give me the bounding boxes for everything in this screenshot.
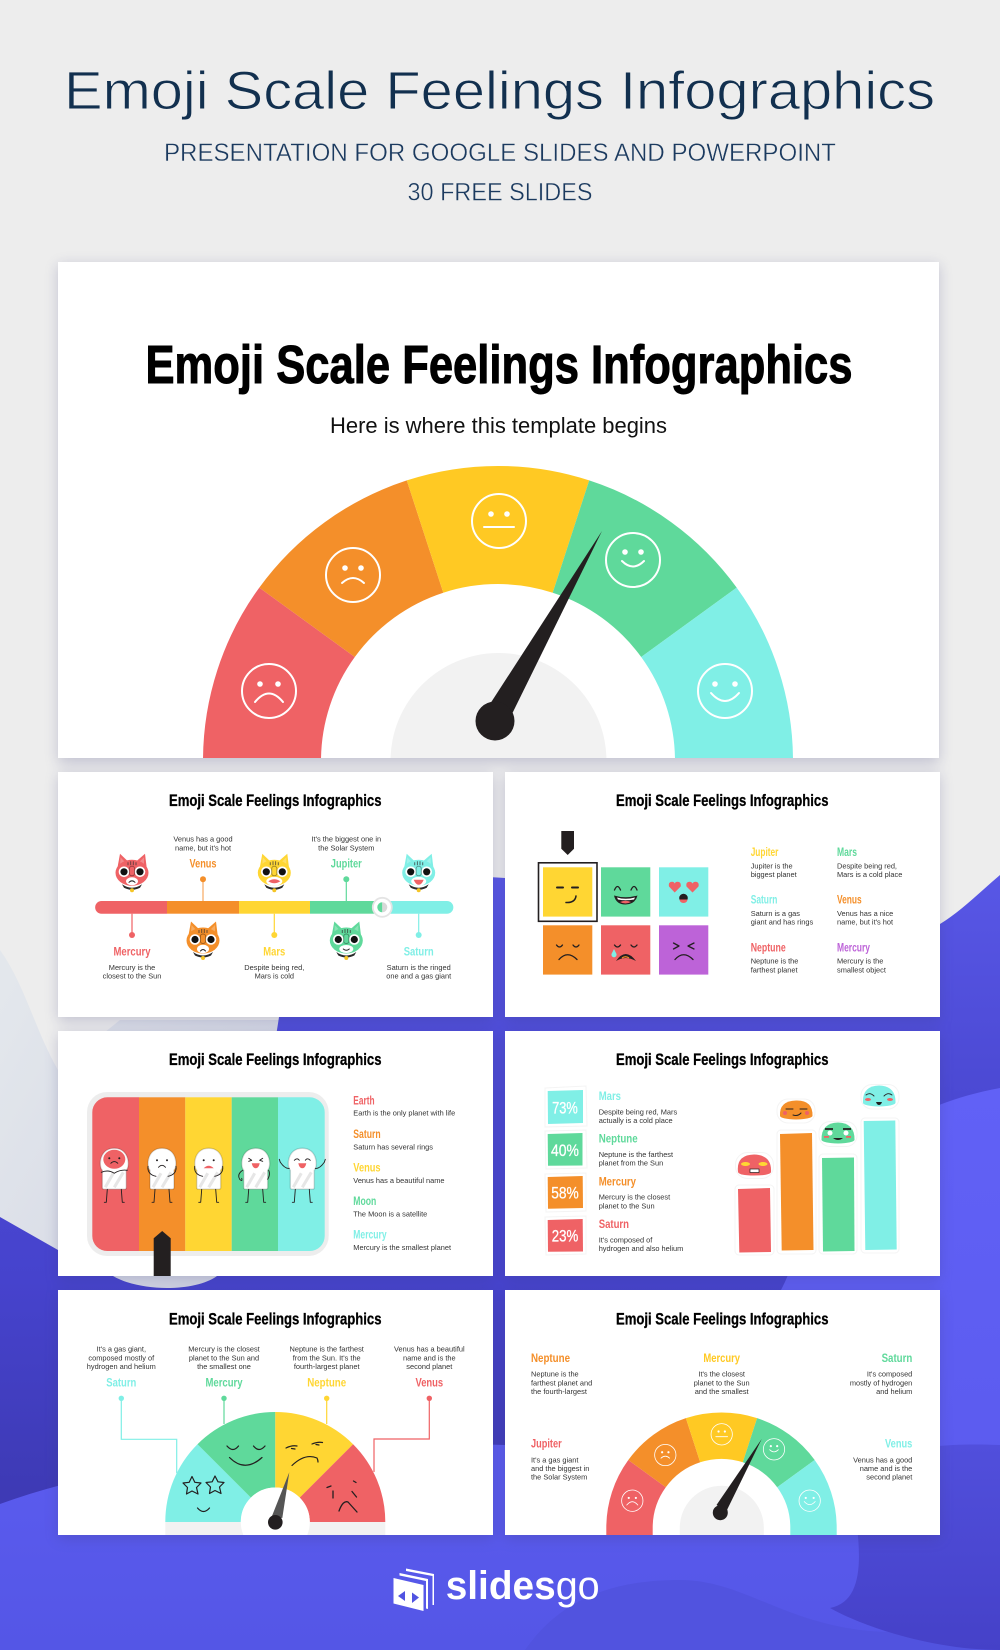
- label: Mercury: [837, 940, 886, 974]
- label: Neptune: Neptune: [751, 940, 786, 954]
- label: Venus: Venus: [415, 1376, 443, 1390]
- label: Venus: [837, 893, 893, 927]
- label: Moon: [353, 1194, 427, 1219]
- label: Mercury: Mercury is the closest: [188, 1345, 260, 1354]
- panel: four segment gauge slide: [58, 1290, 493, 1556]
- character: sad toast: [148, 1148, 176, 1202]
- emoji: squinting: [659, 925, 708, 975]
- marker: Saturn: [416, 914, 422, 938]
- icon: neutral face: [472, 494, 526, 548]
- label: Mercury: Mercury: [353, 1228, 387, 1242]
- label: Mercury: Mercury: [837, 940, 870, 954]
- label: Mercury: closest to the Sun: [103, 972, 161, 981]
- icon: orange blob face: [777, 1099, 815, 1123]
- label: Venus: [853, 1437, 913, 1482]
- emoji: crying: [601, 925, 650, 975]
- label: Saturn: Saturn: [106, 1376, 136, 1390]
- label: Venus: Venus has a nice: [837, 909, 893, 918]
- label: Mercury: Mercury is the: [109, 963, 155, 972]
- label: Mercury: smallest object: [837, 965, 886, 974]
- icon: very sad face: [242, 664, 296, 718]
- label: Saturn: Saturn is a gas: [751, 909, 800, 918]
- stat: 58%: [545, 1173, 586, 1212]
- label: Mercury: and the smallest: [695, 1387, 749, 1396]
- icon: worried yellow cat: [258, 854, 291, 892]
- label: Jupiter: biggest planet: [751, 870, 797, 879]
- icon: happy face: [698, 664, 752, 718]
- gauge needle: [713, 1439, 762, 1520]
- marker: Mars: [271, 914, 277, 938]
- label: Mars: [599, 1089, 677, 1125]
- label: Venus: Venus: [885, 1437, 913, 1451]
- label: Jupiter: [531, 1437, 589, 1482]
- label: Saturn: Saturn: [751, 893, 777, 907]
- label: Mars: [837, 845, 902, 879]
- label: Neptune: the fourth-largest: [531, 1387, 587, 1396]
- emoji: sleepy sad: [543, 925, 592, 975]
- label: Mercury: Mercury: [599, 1174, 636, 1188]
- label: Neptune: [751, 940, 798, 974]
- label: Venus: Venus has a good: [173, 835, 233, 844]
- label: Mercury: the smallest one: [197, 1362, 251, 1371]
- label: Mercury: Mercury: [114, 944, 151, 958]
- label: Saturn: Saturn is the ringed: [387, 963, 451, 972]
- marker: Mercury: [129, 914, 135, 938]
- label: Venus: Venus has a beautiful: [394, 1345, 465, 1354]
- label: Venus: name, but it's hot: [837, 918, 893, 927]
- label: Saturn: mostly of hydrogen: [850, 1378, 912, 1387]
- label: Saturn: Saturn: [599, 1217, 629, 1231]
- label: Neptune: farthest planet and: [531, 1378, 592, 1387]
- label: Saturn: It's a gas giant,: [97, 1345, 146, 1354]
- label: Jupiter: [751, 845, 797, 879]
- stat: 23%: [545, 1216, 586, 1255]
- icon: stacked slides: [394, 1568, 434, 1611]
- panel: five segment gauge slide: [505, 1290, 940, 1535]
- emoji: smirk: [543, 867, 592, 917]
- label: Mercury: Mercury is the smallest planet: [353, 1243, 451, 1252]
- logo: slidesgo: [394, 1564, 600, 1611]
- slide title: Emoji Scale Feelings Infographics: [169, 1050, 382, 1069]
- label: Venus: Venus has a good: [853, 1455, 912, 1464]
- icon: green blob face: [819, 1122, 857, 1146]
- label: Neptune: [531, 1351, 592, 1396]
- slide title: Emoji Scale Feelings Infographics: [616, 1050, 828, 1069]
- label: Neptune: from the Sun. It's the: [293, 1353, 361, 1362]
- stat: 40%: [545, 1130, 587, 1169]
- icon: neutral face: [711, 1424, 732, 1445]
- icon: angry red cat: [116, 854, 148, 892]
- icon: smiling face: [606, 533, 660, 587]
- label: Venus: name and is the: [403, 1353, 456, 1362]
- panel: percent bars slide: [505, 1031, 940, 1276]
- label: Saturn: Saturn has several rings: [353, 1142, 433, 1151]
- label: Jupiter: the Solar System: [318, 843, 374, 852]
- face: upset: [327, 1481, 357, 1512]
- label: Mercury: Mercury: [703, 1351, 740, 1365]
- emoji: laughing: [601, 867, 650, 917]
- label: Saturn: and helium: [876, 1387, 912, 1396]
- gauge needle: [268, 1472, 289, 1530]
- colour scale board: [87, 1092, 329, 1256]
- icon: cyan blob face: [861, 1084, 899, 1109]
- label: Jupiter: [311, 835, 381, 871]
- stat: 40%: 40%: [551, 1141, 579, 1160]
- label: Saturn: [386, 944, 451, 981]
- icon: calm green cat: [330, 922, 363, 960]
- label: Neptune: fourth-largest planet: [294, 1362, 360, 1371]
- panel: emoji squares slide: [505, 772, 940, 1017]
- icon: sad face: [655, 1444, 676, 1466]
- label: Mars: actually is a cold place: [599, 1116, 673, 1125]
- label: Neptune: Neptune is the: [751, 957, 798, 966]
- slide title: Emoji Scale Feelings Infographics: [616, 1309, 828, 1328]
- icon: sad orange cat: [186, 922, 220, 960]
- label: Saturn: hydrogen and helium: [87, 1362, 156, 1371]
- selection frame: [538, 863, 597, 921]
- label: Mercury: [353, 1228, 451, 1252]
- label: Earth: Earth is the only planet with life: [353, 1109, 455, 1118]
- gauge needle: [476, 531, 602, 740]
- pointer marker: [561, 831, 574, 855]
- icon: happy face: [799, 1490, 820, 1511]
- label: Saturn: Saturn: [882, 1351, 912, 1365]
- label: Venus: Venus: [353, 1161, 381, 1175]
- label: Venus: Venus: [837, 893, 862, 907]
- label: Jupiter: Jupiter: [531, 1437, 562, 1451]
- marker: Venus: [200, 876, 206, 901]
- label: Venus: second planet: [866, 1473, 912, 1482]
- label: Jupiter: It's a gas giant: [531, 1455, 578, 1464]
- label: Saturn: It's composed: [867, 1370, 912, 1379]
- pointer marker: [154, 1231, 171, 1276]
- label: Jupiter: Jupiter: [331, 857, 362, 871]
- icon: sad face: [326, 548, 380, 602]
- label: Saturn: It's composed of: [599, 1235, 653, 1244]
- label: Mercury: Mercury: [206, 1376, 243, 1390]
- label: Mercury: [103, 944, 161, 981]
- label: Neptune: Neptune: [531, 1351, 570, 1365]
- label: Moon: The Moon is a satellite: [353, 1210, 427, 1219]
- slide title: Emoji Scale Feelings Infographics: [616, 791, 828, 810]
- label: Venus: second planet: [406, 1362, 452, 1371]
- label: Mars: Mars is cold: [255, 972, 294, 981]
- label: Jupiter: Jupiter: [751, 845, 779, 859]
- hero subtitle: Here is where this template begins: [330, 413, 667, 438]
- slide title: Emoji Scale Feelings Infographics: [169, 1309, 382, 1328]
- header subtitle: 30 FREE SLIDES: [408, 178, 592, 206]
- label: Mercury: planet to the Sun: [694, 1378, 750, 1387]
- label: Mars: Despite being red,: [244, 963, 304, 972]
- label: Venus: name, but it's hot: [175, 843, 231, 852]
- character: pleased toast: [239, 1148, 270, 1202]
- stat: 73%: [545, 1086, 587, 1127]
- label: Neptune: Neptune: [307, 1376, 346, 1390]
- label: Neptune: [290, 1345, 364, 1390]
- label: Venus: Venus: [190, 857, 217, 871]
- label: Saturn: [751, 893, 813, 927]
- emoji: heart eyes: [659, 867, 708, 917]
- label: Mercury: planet to the Sun: [599, 1201, 655, 1210]
- stat: 58%: 58%: [551, 1184, 579, 1203]
- bar chart: [735, 1118, 899, 1255]
- label: Mars: Mars: [837, 845, 857, 859]
- label: Mercury: [599, 1174, 670, 1210]
- label: Saturn: [850, 1351, 912, 1396]
- chart: gauge: [165, 1412, 386, 1535]
- label: Mars: Despite being red, Mars: [599, 1107, 677, 1116]
- header subtitle: [164, 139, 836, 206]
- panel: cat timeline slide: [58, 772, 493, 1017]
- character: unsure toast: [195, 1148, 223, 1202]
- label: Venus: name and is the: [860, 1464, 912, 1473]
- face: content: [227, 1446, 265, 1465]
- icon: very sad face: [622, 1490, 643, 1511]
- label: Venus: [173, 835, 233, 871]
- stat: 23%: 23%: [552, 1227, 578, 1246]
- connector: Venus: [374, 1396, 432, 1472]
- label: Jupiter: It's the biggest one in: [311, 835, 381, 844]
- label: Mars: Despite being red,: [837, 861, 897, 870]
- label: Venus: Venus has a beautiful name: [353, 1176, 445, 1185]
- panel: hero slide: [58, 262, 939, 758]
- label: Neptune: Neptune is the farthest: [599, 1150, 673, 1159]
- label: Neptune: farthest planet: [751, 965, 798, 974]
- connector: Neptune: [324, 1396, 329, 1424]
- header title: Emoji Scale Feelings Infographics: [64, 61, 935, 121]
- label: Saturn: [599, 1217, 683, 1253]
- face: starry eyes: [183, 1476, 224, 1512]
- label: Mars: [244, 944, 304, 981]
- label: Mars: Mars: [263, 944, 286, 958]
- connector: Mercury: [221, 1396, 227, 1424]
- hero title: Emoji Scale Feelings Infographics: [146, 335, 852, 395]
- icon: red blob face: [736, 1152, 774, 1178]
- slide title: Emoji Scale Feelings Infographics: [169, 791, 382, 810]
- face: skeptical: [286, 1442, 322, 1466]
- label: Neptune: Neptune is the: [531, 1370, 579, 1379]
- label: Saturn: one and a gas giant: [386, 972, 451, 981]
- timeline bar: [95, 898, 453, 917]
- label: Jupiter: the Solar System: [531, 1473, 587, 1482]
- label: Saturn: [353, 1127, 433, 1151]
- character: happy toast: [279, 1148, 325, 1202]
- label: Saturn: Saturn: [404, 944, 434, 958]
- label: Saturn: giant and has rings: [751, 918, 813, 927]
- label: Saturn: hydrogen and also helium: [599, 1244, 683, 1253]
- label: Venus: [394, 1345, 465, 1390]
- wordmark: slidesgo: [446, 1564, 600, 1608]
- stat: 73%: 73%: [552, 1098, 578, 1117]
- icon: happy cyan cat: [402, 854, 435, 892]
- label: Earth: Earth: [353, 1093, 375, 1107]
- marker: Jupiter: [343, 876, 349, 901]
- label: Jupiter: Jupiter is the: [751, 861, 793, 870]
- label: Mercury: [694, 1351, 750, 1396]
- label: Earth: [353, 1093, 455, 1118]
- label: Neptune: Neptune is the farthest: [290, 1345, 364, 1354]
- label: Neptune: [599, 1132, 673, 1168]
- label: Jupiter: and the biggest in: [531, 1464, 589, 1473]
- panel: toast scale slide: [58, 1031, 493, 1276]
- icon: smiling face: [763, 1439, 785, 1460]
- chart: hero gauge: [203, 466, 793, 758]
- label: Saturn: [87, 1345, 156, 1390]
- character: angry toast: [100, 1148, 128, 1202]
- header subtitle: PRESENTATION FOR GOOGLE SLIDES AND POWERPOINT: [164, 139, 836, 167]
- connector: Saturn: [119, 1396, 177, 1473]
- label: Moon: Moon: [353, 1194, 376, 1208]
- label: Saturn: Saturn: [353, 1127, 381, 1141]
- label: Mercury: planet to the Sun and: [189, 1353, 259, 1362]
- label: Saturn: composed mostly of: [88, 1353, 155, 1362]
- label: Mars: Mars: [599, 1089, 621, 1103]
- label: Mercury: Mercury is the closest: [599, 1193, 670, 1202]
- label: Mercury: Mercury is the: [837, 957, 883, 966]
- label: Neptune: Neptune: [599, 1132, 638, 1146]
- label: Mercury: It's the closest: [698, 1370, 745, 1379]
- label: Mars: Mars is a cold place: [837, 870, 902, 879]
- chart: gauge: [606, 1412, 837, 1535]
- label: Mercury: [188, 1345, 260, 1390]
- label: Venus: [353, 1161, 445, 1185]
- label: Neptune: planet from the Sun: [599, 1159, 663, 1168]
